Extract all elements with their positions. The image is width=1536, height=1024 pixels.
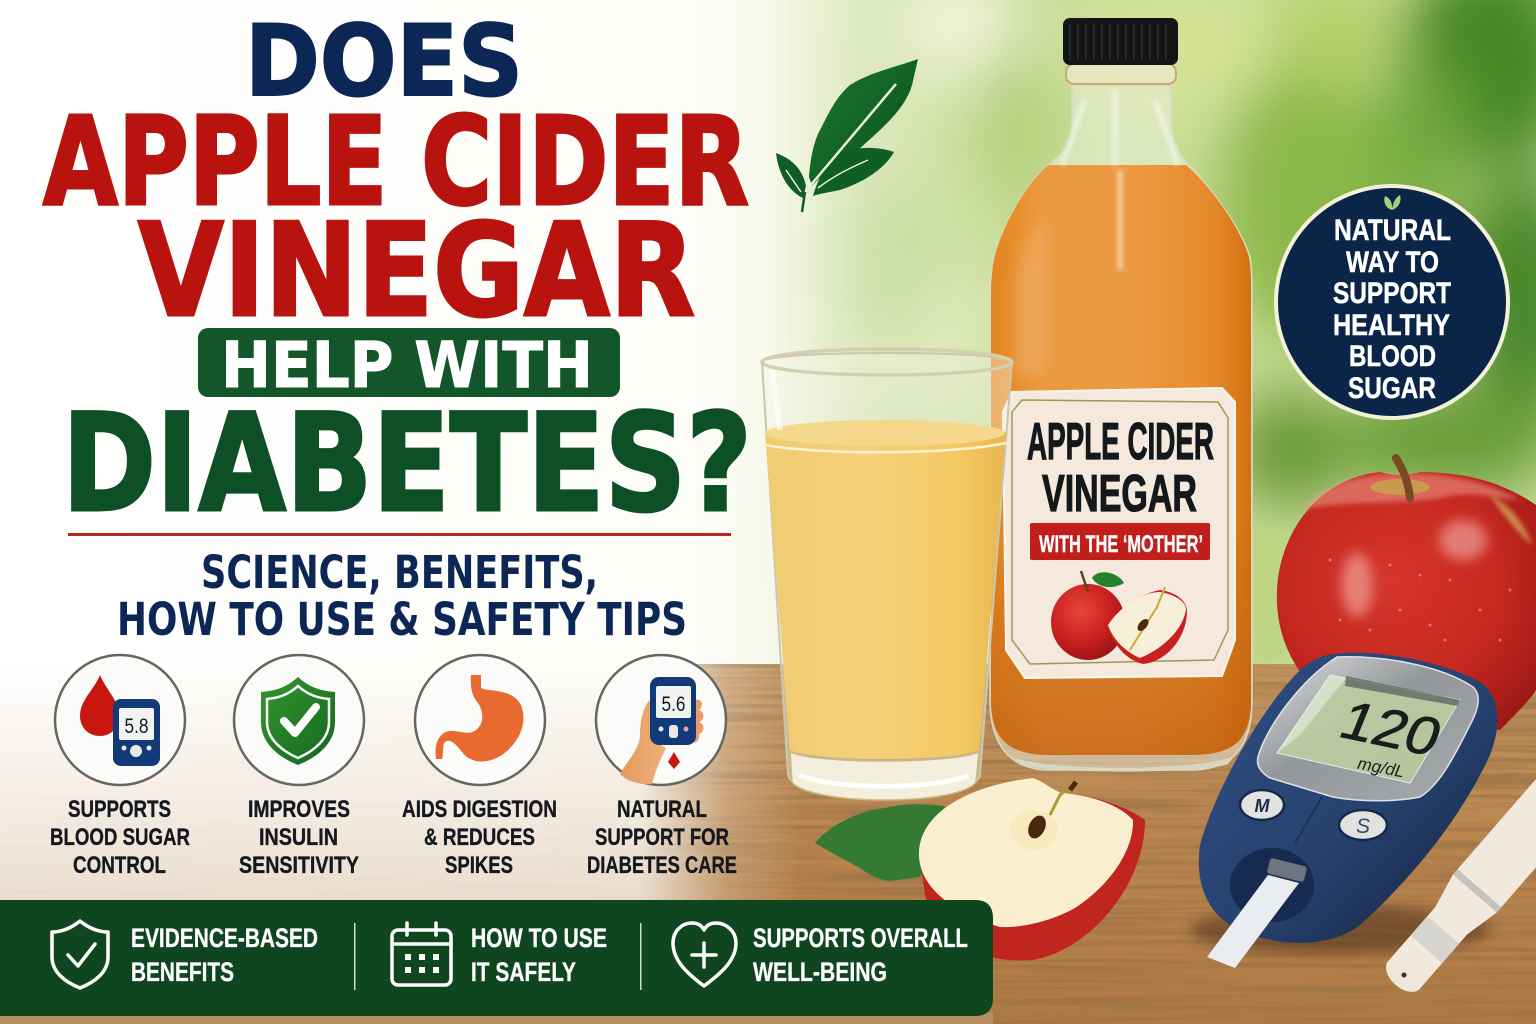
icon: hand holding glucose meter 5.6 [596, 655, 726, 785]
lancet pen [1374, 718, 1536, 1004]
benefit label: digestion: & REDUCES [424, 824, 535, 851]
text: evidence-based benefits: EVIDENCE-BASED [131, 923, 318, 953]
badge: natural way to support healthy blood sugar: SUPPORT [1333, 277, 1451, 310]
benefit label: blood sugar control: CONTROL [73, 852, 166, 879]
benefit label: blood sugar control: BLOOD SUGAR [50, 824, 190, 851]
title: VINEGAR: VINEGAR [138, 197, 695, 346]
text: evidence-based benefits [131, 923, 318, 987]
half apple [919, 778, 1145, 961]
icon: heart with plus [673, 923, 736, 986]
badge leaf icon [1384, 195, 1401, 210]
bottom panel [0, 900, 993, 1016]
bottle label: APPLE CIDER [1027, 413, 1214, 471]
label apple whole [1051, 571, 1125, 660]
benefit label: digestion: SPIKES [445, 852, 513, 879]
glucose meter showing 120 mg/dL: S [1356, 815, 1370, 838]
badge: natural way to support healthy blood sugar: WAY TO [1346, 246, 1439, 279]
title: DIABETES?: DIABETES? [62, 385, 752, 542]
leaf under half apple [815, 804, 945, 881]
bottle of apple cider vinegar [990, 18, 1252, 772]
benefit label: digestion: AIDS DIGESTION [402, 796, 557, 823]
title: DOES: DOES [245, 5, 523, 119]
text: evidence-based benefits: BENEFITS [131, 957, 234, 987]
benefit label: insulin sensitivity [239, 796, 359, 879]
glucose meter showing 120 mg/dL: mg/dL [1356, 754, 1406, 781]
text: how to use it safely: HOW TO USE [471, 923, 607, 953]
benefit label: digestion [402, 796, 557, 879]
icon: blood drop and glucose meter 5.8 [55, 655, 185, 785]
benefit label: diabetes care: NATURAL [617, 796, 707, 823]
label apple half [1108, 587, 1187, 664]
glucose meter showing 120 mg/dL: M [1254, 796, 1270, 816]
benefit label: diabetes care: DIABETES CARE [587, 852, 737, 879]
text: supports overall well-being: SUPPORTS OVERALL [753, 923, 968, 953]
icon: stomach [415, 655, 545, 785]
title: APPLE CIDER: APPLE CIDER [43, 91, 749, 233]
title banner: HELP WITH: HELP WITH [221, 329, 593, 402]
benefit label: insulin sensitivity: INSULIN [259, 824, 338, 851]
badge: natural way to support healthy blood sugar: NATURAL [1334, 214, 1451, 247]
icon: floating leaf [776, 59, 918, 212]
text: supports overall well-being [753, 923, 968, 987]
benefit label: insulin sensitivity: SENSITIVITY [239, 852, 359, 879]
icon: blood drop and glucose meter 5.8: 5.8 [124, 715, 148, 738]
bottle label [1003, 388, 1235, 678]
icon: hand holding glucose meter 5.6: 5.6 [662, 693, 686, 716]
badge: natural way to support healthy blood sugar: SUGAR [1348, 372, 1436, 405]
bottle label: VINEGAR [1042, 465, 1197, 523]
benefit label: diabetes care [587, 796, 737, 879]
subtitle [117, 546, 687, 646]
text: how to use it safely: IT SAFELY [471, 957, 576, 987]
text: supports overall well-being: WELL-BEING [753, 957, 887, 987]
glass of diluted vinegar [762, 349, 1012, 800]
text: how to use it safely [471, 923, 607, 987]
benefit label: blood sugar control [50, 796, 190, 879]
icon: shield check [52, 921, 108, 988]
badge: natural way to support healthy blood sugar: HEALTHY [1333, 309, 1450, 342]
benefit label: blood sugar control: SUPPORTS [68, 796, 171, 823]
benefit label: diabetes care: SUPPORT FOR [595, 824, 729, 851]
icon: calendar [392, 923, 451, 985]
subtitle: HOW TO USE & SAFETY TIPS [117, 593, 687, 646]
glucose meter showing 120 mg/dL [1190, 653, 1497, 968]
big red apple [1277, 458, 1536, 730]
subtitle: SCIENCE, BENEFITS, [201, 546, 598, 599]
badge: natural way to support healthy blood sugar [1276, 186, 1508, 418]
glucose meter showing 120 mg/dL: 120 [1332, 690, 1450, 767]
badge: natural way to support healthy blood sugar: BLOOD [1349, 340, 1436, 373]
icon: green shield with check [234, 655, 364, 785]
benefit label: insulin sensitivity: IMPROVES [248, 796, 350, 823]
bottle label: WITH THE ‘MOTHER’ [1039, 531, 1203, 558]
